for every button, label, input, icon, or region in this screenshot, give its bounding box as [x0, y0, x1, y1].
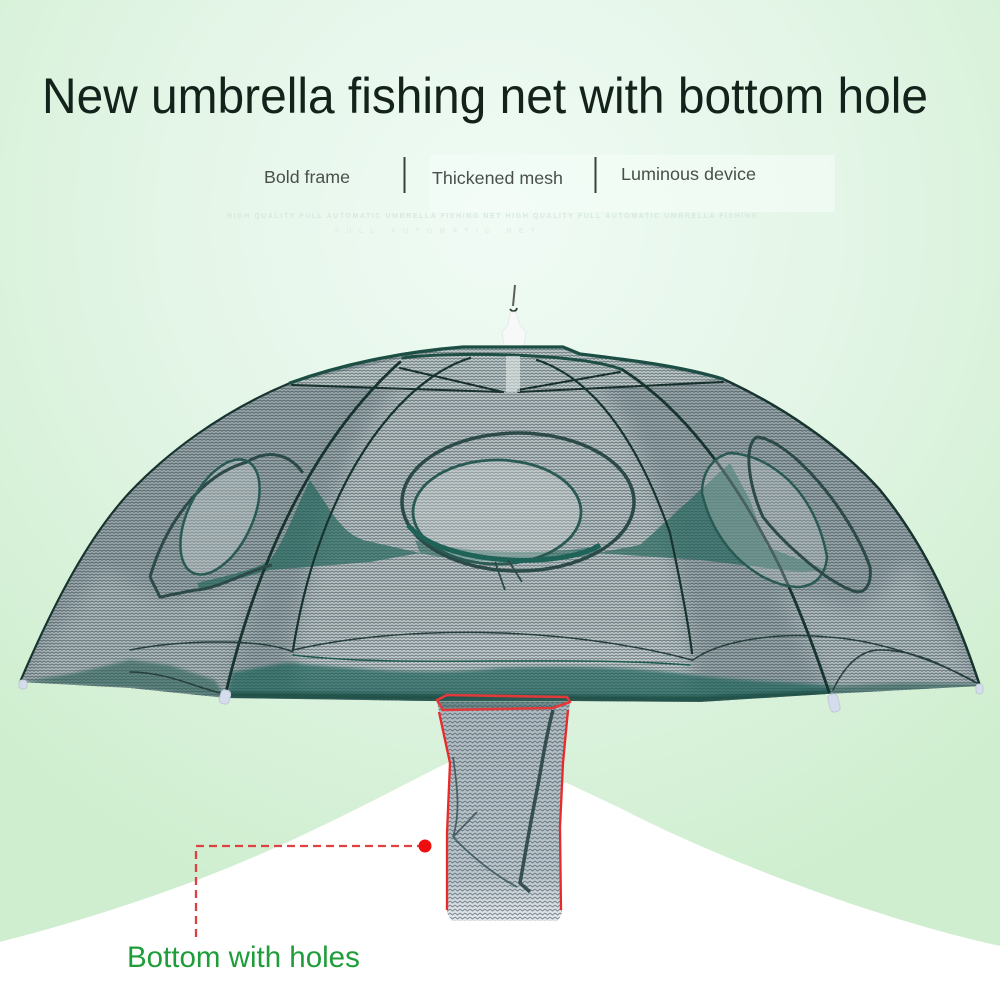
feature: bold frame: Bold frame [264, 167, 350, 187]
inner left rib [293, 358, 470, 650]
faint sub caption [227, 213, 758, 235]
red bag outline [439, 710, 568, 910]
feature: luminous device: Luminous device [621, 164, 756, 184]
center panel [293, 370, 692, 655]
red bag rim [437, 695, 570, 710]
center entrance [402, 433, 634, 590]
right funnel band [597, 463, 827, 572]
green bottom band [226, 663, 835, 703]
green bottom band left [20, 660, 226, 698]
mesh texture [0, 340, 1000, 710]
bag folds [520, 710, 553, 892]
divider two [594, 157, 596, 193]
callout label: Bottom with holes [127, 941, 360, 974]
floor lines [130, 632, 977, 694]
title: New umbrella fishing net with bottom hole [42, 68, 928, 124]
lower right panel [780, 560, 980, 694]
lower green edge [226, 690, 830, 703]
green bottom band right [830, 683, 980, 696]
bottom floor [288, 638, 698, 688]
cross bars [292, 368, 723, 392]
divider one [404, 157, 406, 193]
strong right rib [623, 370, 829, 692]
bottom mesh bag [437, 695, 570, 921]
luminous device stem [506, 356, 520, 392]
feature labels [264, 155, 835, 212]
top cap [290, 347, 723, 388]
white curved floor [0, 763, 1000, 1000]
lower left panel [20, 570, 260, 695]
inner right rib [537, 360, 692, 653]
hook and luminous device [502, 285, 526, 350]
faint sub caption: FULL AUTOMATIC NET [335, 228, 536, 235]
umbrella net [0, 340, 1000, 713]
callout leader [196, 840, 432, 940]
center funnel band [415, 540, 600, 562]
feature: thickened mesh: Thickened mesh [432, 168, 563, 188]
right entrance [702, 437, 870, 592]
left funnel band [197, 480, 420, 590]
strong left rib [226, 362, 400, 692]
left entrance [150, 447, 303, 597]
tip caps [19, 680, 983, 713]
net canopy [0, 340, 1000, 710]
faint sub caption: HIGH QUALITY FULL AUTOMATIC UMBRELLA FISHING NET HIGH QUALITY FULL AUTOMATIC UMBRELLA FISHING [227, 213, 758, 220]
canopy frame [20, 347, 980, 694]
top ring [290, 347, 723, 383]
